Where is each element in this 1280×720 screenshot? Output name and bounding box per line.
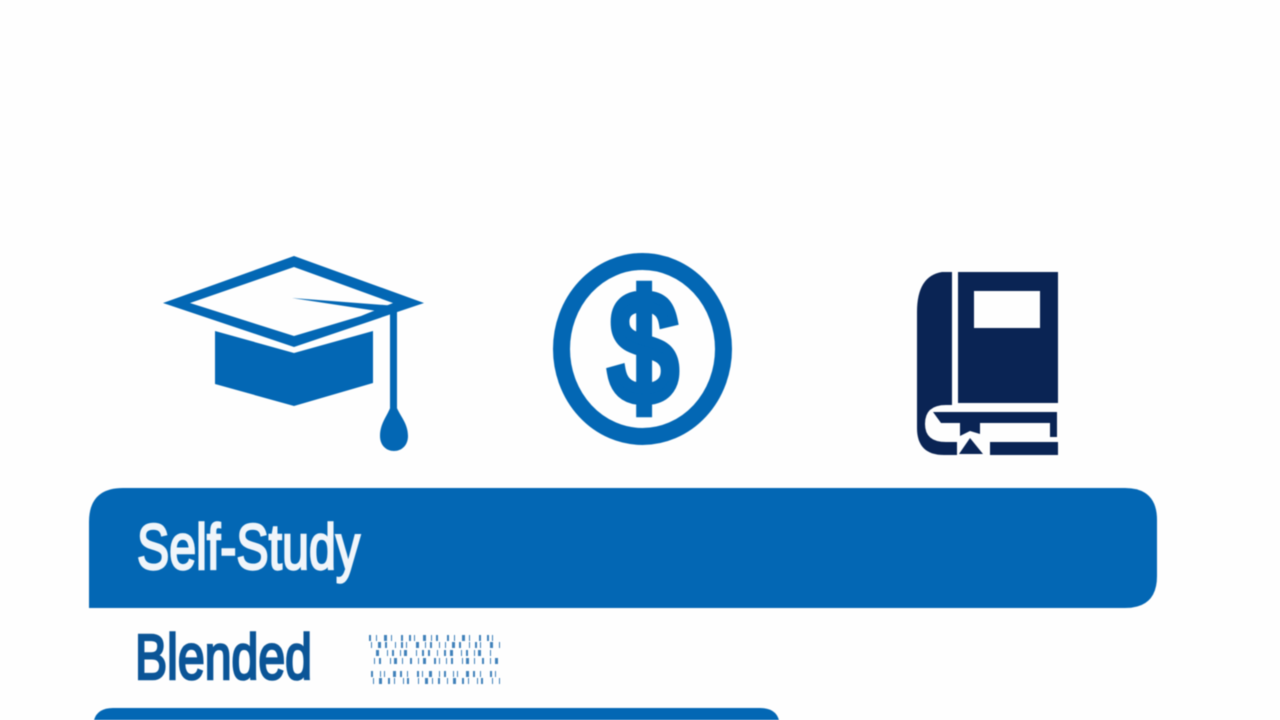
icon: book	[917, 272, 1060, 456]
bookmark	[959, 423, 983, 454]
bar: Self-Study	[89, 488, 1157, 608]
illegible text smudge	[369, 638, 501, 681]
cap board	[163, 256, 424, 347]
tassel drop	[380, 405, 408, 451]
coin ring	[562, 262, 724, 436]
label: Self-Study: Self-Study	[137, 511, 360, 583]
book cover with label	[958, 272, 1058, 403]
icon: graduation cap	[163, 256, 424, 451]
page band	[933, 412, 1057, 437]
icon: dollar coin	[562, 262, 724, 436]
book spine and base	[917, 272, 1058, 455]
dollar sign: $	[610, 262, 677, 434]
bar: next row, cropped	[93, 708, 780, 720]
bar shape	[89, 488, 1157, 608]
tassel cord	[292, 298, 397, 409]
label: Blended: Blended	[135, 621, 312, 693]
book pages	[925, 405, 1060, 456]
cap base	[215, 331, 373, 406]
